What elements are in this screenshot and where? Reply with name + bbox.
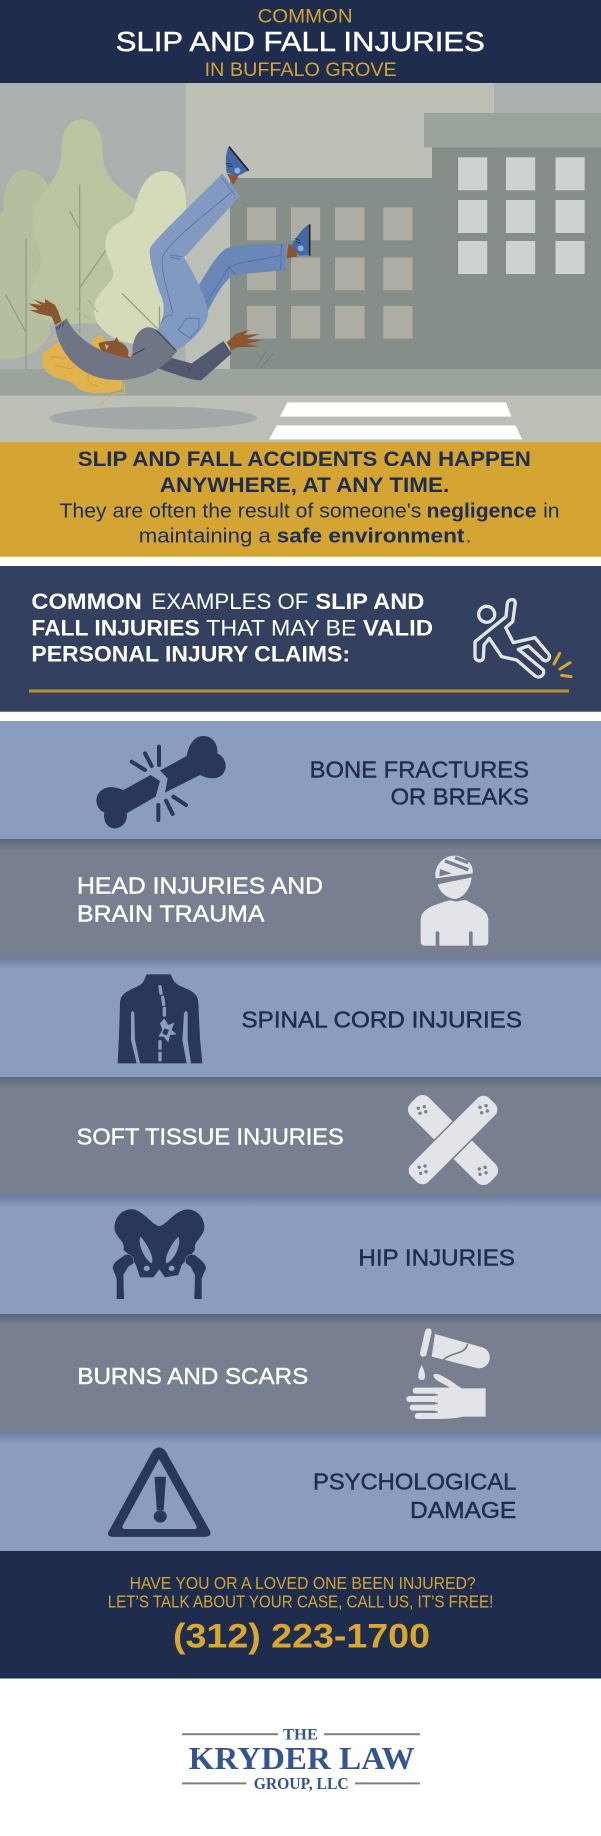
statement body: in — [543, 500, 560, 522]
subtitle: IN BUFFALO GROVE — [205, 60, 397, 81]
examples heading: THAT MAY BE — [206, 616, 356, 641]
tree: middle — [30, 119, 136, 333]
panel: call to action — [0, 1551, 601, 1678]
label: bone fractures — [310, 757, 529, 809]
torso and front arm — [55, 318, 177, 380]
statement heading: ANYWHERE, AT ANY TIME. — [160, 473, 449, 497]
logo: the kryder law group: GROUP, LLC — [254, 1774, 349, 1793]
road — [0, 396, 601, 442]
band: bone fractures — [0, 721, 601, 839]
fall shadow — [49, 407, 257, 429]
label: head injuries: HEAD INJURIES AND — [77, 873, 323, 899]
label: psychological: DAMAGE — [410, 1497, 516, 1523]
icon: spine back — [118, 974, 202, 1063]
examples heading: SLIP AND — [315, 589, 424, 614]
statement body: . — [466, 525, 471, 547]
logo: the kryder law group — [182, 1726, 420, 1793]
icon: broken bone — [96, 736, 226, 828]
icon: warning triangle — [108, 1447, 211, 1537]
band: soft tissue — [0, 1077, 601, 1196]
examples heading — [31, 589, 433, 667]
call to action text: HAVE YOU OR A LOVED ONE BEEN INJURED? — [130, 1573, 476, 1593]
examples heading: VALID — [363, 616, 433, 641]
label: psychological — [313, 1469, 516, 1523]
icon: chemical burn on hand — [409, 1332, 490, 1419]
label: psychological: PSYCHOLOGICAL — [313, 1469, 516, 1495]
examples heading: COMMON — [31, 589, 142, 614]
statement body: negligence — [427, 500, 537, 522]
band: spinal cord — [0, 958, 601, 1077]
label: hip: HIP INJURIES — [358, 1244, 515, 1270]
icon: crossed bandages — [404, 1091, 502, 1189]
tree branches — [5, 184, 159, 369]
person falling — [28, 147, 310, 407]
call to action text — [108, 1573, 493, 1612]
motion lines — [257, 351, 273, 368]
examples heading: EXAMPLES OF — [151, 589, 308, 614]
label: burns: BURNS AND SCARS — [77, 1363, 308, 1389]
statement heading: SLIP AND FALL ACCIDENTS CAN HAPPEN — [78, 447, 531, 471]
icon: falling person — [475, 599, 571, 677]
back jeans leg — [198, 243, 287, 313]
back arm — [158, 341, 232, 380]
label: bone fractures: BONE FRACTURES — [310, 757, 529, 783]
label: spinal cord: SPINAL CORD INJURIES — [242, 1006, 522, 1032]
examples heading: PERSONAL INJURY CLAIMS: — [31, 642, 350, 667]
panel: common examples — [0, 566, 601, 712]
icon: bandaged head — [421, 856, 488, 946]
phone number: (312) 223-1700 — [173, 1618, 430, 1656]
band: psychological — [0, 1432, 601, 1551]
hair — [42, 335, 123, 393]
icon: pelvis — [113, 1209, 206, 1299]
heading: common: COMMON — [258, 7, 353, 28]
building: right roof — [424, 113, 601, 147]
hands and ankles — [28, 173, 298, 351]
label: soft tissue: SOFT TISSUE INJURIES — [77, 1123, 344, 1149]
statement heading — [78, 447, 531, 497]
band: burns — [0, 1314, 601, 1432]
front jeans leg — [150, 173, 240, 350]
logo: the kryder law group: THE — [283, 1726, 318, 1743]
tree: back left — [0, 170, 50, 359]
panel: yellow statement — [0, 442, 601, 557]
head — [98, 337, 131, 360]
statement body: safe environment — [277, 525, 465, 547]
call to action text: LET’S TALK ABOUT YOUR CASE, CALL US, IT’S FREE! — [108, 1592, 493, 1612]
label: head injuries: BRAIN TRAUMA — [77, 901, 265, 927]
label: head injuries — [77, 873, 323, 927]
statement body — [59, 500, 560, 547]
band: head injuries — [0, 839, 601, 958]
sidewalk — [0, 369, 601, 396]
band: hip — [0, 1196, 601, 1314]
label: bone fractures: OR BREAKS — [391, 783, 529, 809]
crosswalk — [269, 402, 522, 439]
statement body: maintaining a — [139, 525, 272, 547]
panel: header — [0, 0, 601, 83]
illustration: falling person street scene — [0, 83, 601, 442]
windows: right building — [458, 157, 585, 274]
examples heading: FALL INJURIES — [31, 616, 200, 641]
statement body: They are often the result of someone's — [59, 500, 421, 522]
windows: left building — [247, 207, 412, 339]
title: SLIP AND FALL INJURIES — [116, 26, 485, 57]
shoes — [226, 147, 310, 256]
logo: the kryder law group: KRYDER LAW — [189, 1740, 415, 1776]
building: right block and left block — [230, 147, 601, 369]
tree: front — [94, 171, 186, 350]
